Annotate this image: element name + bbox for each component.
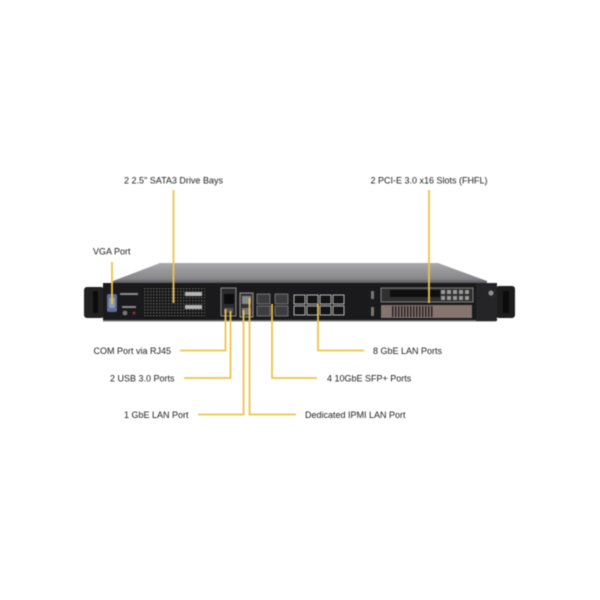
small status slots (371, 291, 374, 316)
callout: 1 GbE LAN port: 1 GbE LAN Port (124, 410, 189, 420)
left rack handle (84, 287, 104, 318)
callout: 8 GbE LAN ports (318, 304, 443, 356)
callout: COM port (94, 309, 226, 356)
chassis top cover (113, 263, 487, 284)
right rack handle (496, 286, 515, 318)
callout: VGA port (93, 246, 131, 304)
callout: SATA3 drive bays: 2 2.5" SATA3 Drive Bays (124, 176, 223, 186)
front labels and buttons (120, 293, 138, 315)
callout: SATA3 drive bays (124, 176, 223, 303)
callout: COM port: COM Port via RJ45 (94, 346, 171, 356)
upper PCI-E slot (381, 288, 473, 302)
chassis front panel (103, 283, 496, 321)
drive bay connectors (185, 292, 202, 309)
COM and USB port block (221, 288, 236, 316)
callout: PCI-E slots (370, 176, 488, 303)
callout: SFP+ ports: 4 10GbE SFP+ Ports (327, 374, 412, 384)
right rack ear (476, 283, 497, 321)
callout: 8 GbE LAN ports: 8 GbE LAN Ports (373, 346, 443, 356)
callout: USB ports (110, 311, 230, 384)
callout: IPMI LAN port (250, 298, 406, 420)
callout: IPMI LAN port: Dedicated IPMI LAN Port (305, 410, 406, 420)
lower PCI-E slot (381, 305, 472, 318)
callout: 1 GbE LAN port (124, 310, 244, 420)
drive bay vent mesh (143, 287, 171, 318)
SFP+ ports (257, 294, 288, 316)
LAN and IPMI port block (240, 293, 253, 317)
VGA port (107, 294, 117, 312)
callout: SFP+ ports (272, 304, 412, 384)
server chassis (84, 263, 515, 322)
callout: PCI-E slots: 2 PCI-E 3.0 x16 Slots (FHFL) (370, 176, 488, 186)
8 GbE LAN ports (294, 295, 344, 315)
callout: USB ports: 2 USB 3.0 Ports (110, 374, 175, 384)
callout: VGA port: VGA Port (93, 246, 131, 256)
